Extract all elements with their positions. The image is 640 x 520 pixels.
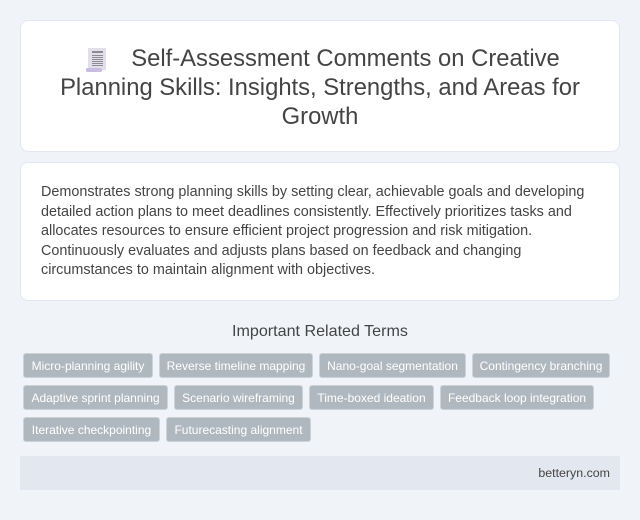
tag [23, 385, 168, 410]
tag: Micro-planning agility [32, 359, 144, 373]
summary text: detailed action plans to meet deadlines consistently. Effectively prioritizes tasks and [41, 204, 572, 220]
summary text: Continuously evaluates and adjusts plans based on feedback and changing [41, 242, 521, 258]
tag [472, 353, 610, 378]
title card [20, 20, 620, 152]
tag [23, 417, 160, 442]
title [60, 45, 580, 130]
tag: Reverse timeline mapping [167, 359, 305, 373]
tag [174, 385, 303, 410]
summary text: allocates resources to ensure efficient project progression and risk mitigation. [41, 223, 532, 239]
tag: Adaptive sprint planning [31, 391, 160, 405]
summary text: Demonstrates strong planning skills by setting clear, achievable goals and developing [41, 184, 584, 200]
summary text [41, 184, 584, 278]
tag [309, 385, 434, 410]
tag [23, 353, 153, 378]
summary text: circumstances to maintain alignment with objectives. [41, 262, 375, 278]
footer credit: betteryn.com [538, 466, 610, 480]
tag: Feedback loop integration [448, 391, 586, 405]
tag: Scenario wireframing [182, 391, 295, 405]
footer bar [20, 456, 620, 490]
icon: document scroll [86, 48, 106, 72]
summary card [20, 162, 620, 301]
tag [440, 385, 594, 410]
tag: Time-boxed ideation [317, 391, 426, 405]
tag list [23, 353, 610, 442]
tag: Contingency branching [480, 359, 602, 373]
title: Growth [282, 103, 358, 130]
title: Planning Skills: Insights, Strengths, and Areas for [60, 74, 580, 101]
tag [166, 417, 311, 442]
tag: Futurecasting alignment [174, 423, 303, 437]
tag [159, 353, 313, 378]
tag [319, 353, 466, 378]
title: Self-Assessment Comments on Creative [131, 45, 560, 72]
heading: related terms: Important Related Terms [232, 322, 408, 340]
tag: Iterative checkpointing [32, 423, 151, 437]
tag: Nano-goal segmentation [327, 359, 458, 373]
